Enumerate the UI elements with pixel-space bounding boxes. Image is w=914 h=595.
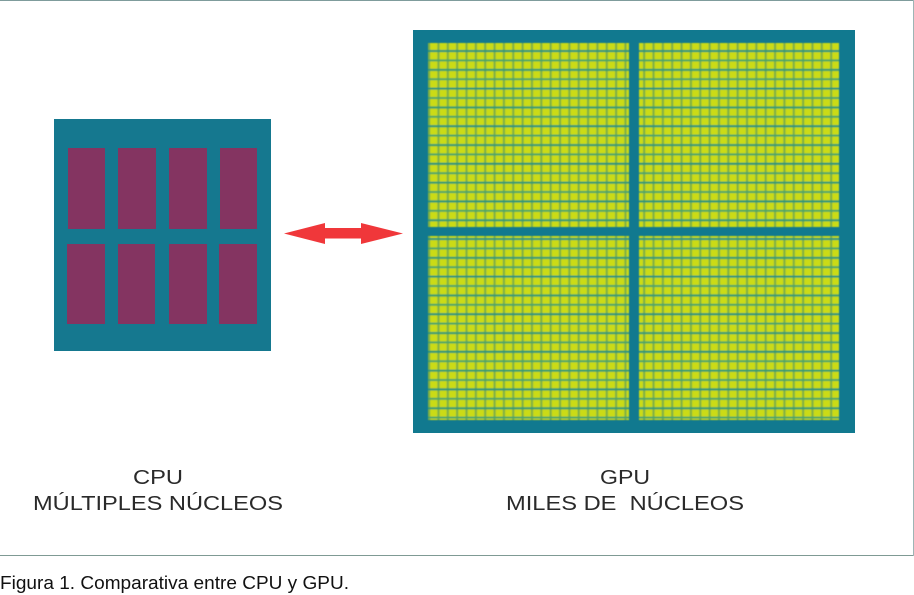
label: GPU: [506, 467, 744, 515]
label: GPU: GPU: [600, 467, 650, 489]
GPU core grids: [428, 43, 839, 420]
panel: CPU: [54, 119, 271, 351]
label: GPU: MILES DE NÚCLEOS: [506, 492, 744, 515]
panel: GPU: [413, 30, 855, 433]
label: CPU: CPU: [133, 467, 183, 489]
label: CPU: [33, 467, 283, 515]
label: CPU: MÚLTIPLES NÚCLEOS: [33, 492, 283, 515]
CPU cores, bottom row: [67, 244, 257, 324]
arrow: double-headed comparison: [284, 223, 403, 244]
caption: Figura 1. Comparativa entre CPU y GPU.: [0, 573, 349, 593]
CPU cores, top row: [68, 148, 257, 229]
